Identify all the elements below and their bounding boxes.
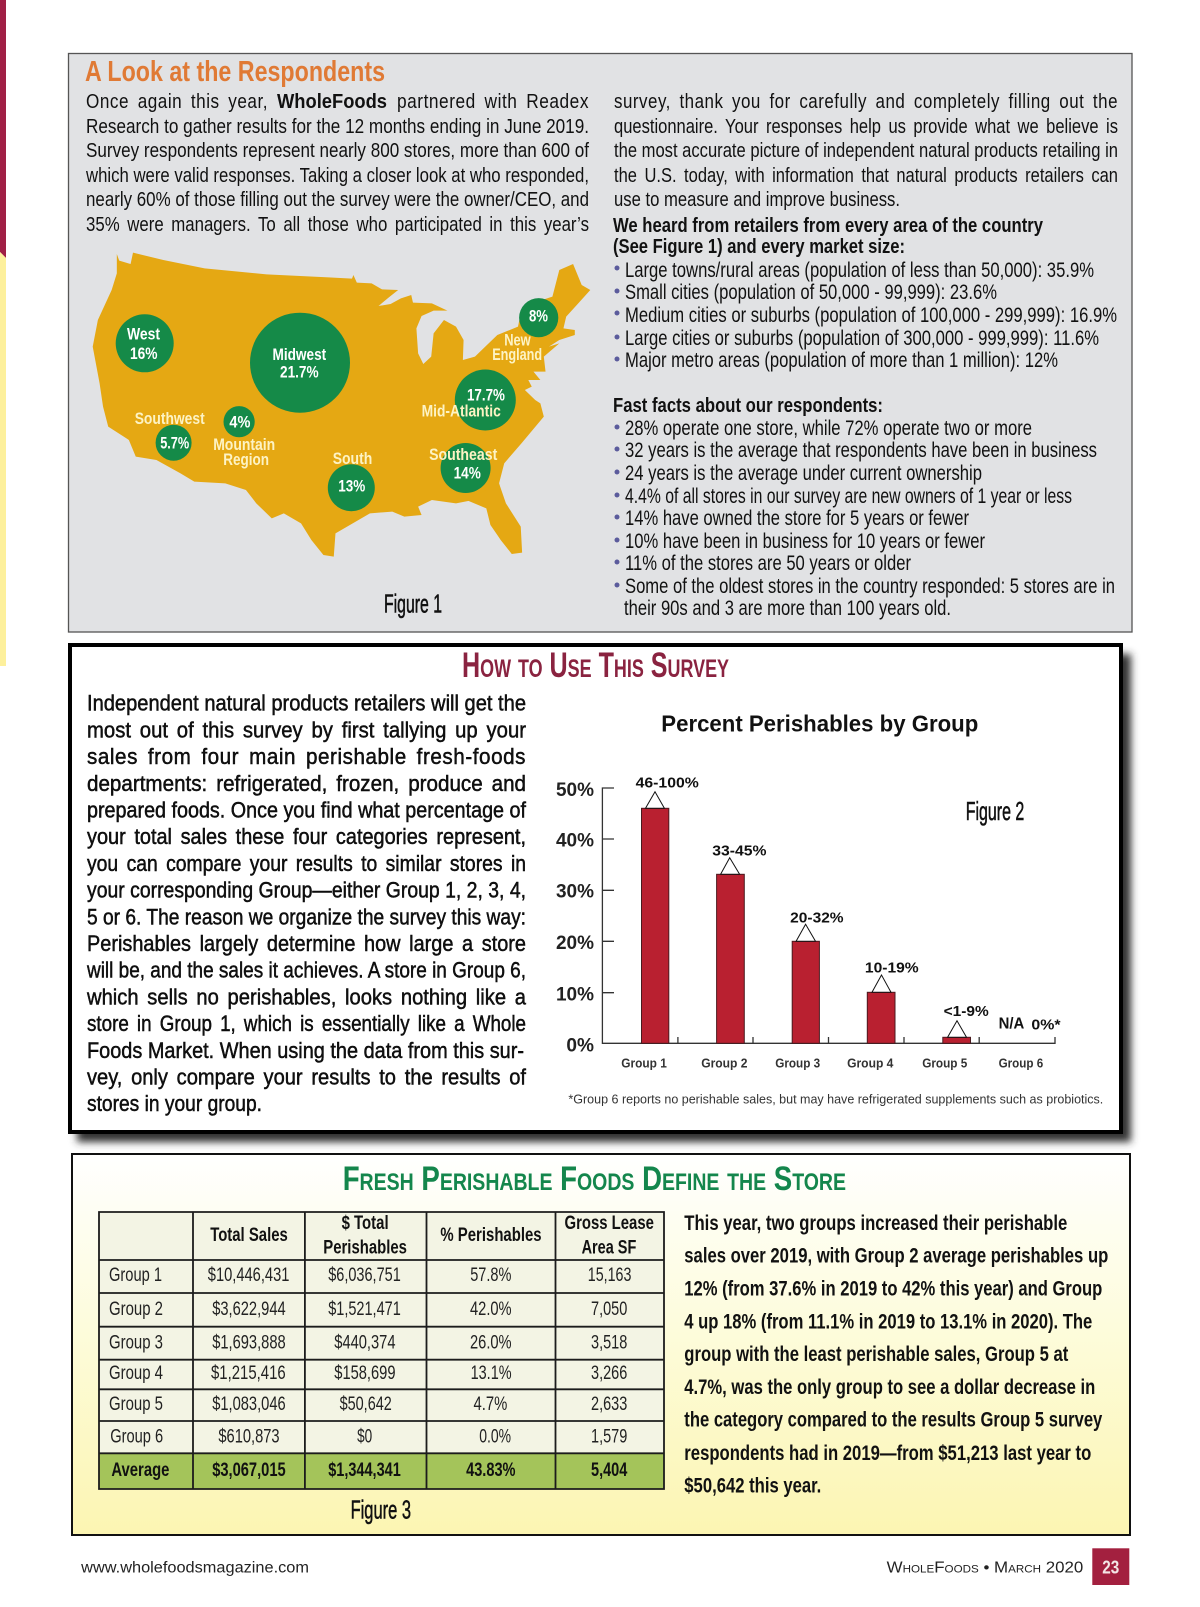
text block: intro left column: partnered with Readex	[397, 91, 589, 113]
text block: how to use: which sells no perishables, looks nothing like a	[86, 984, 526, 1009]
footer url: www.wholefoodsmagazine.com	[80, 1559, 309, 1576]
row: average: $3,067,015	[212, 1459, 286, 1481]
value labels: N/A	[999, 1015, 1024, 1032]
row: group 5: Group 5	[109, 1393, 163, 1415]
text block: how to use: departments: refrigerated, frozen, produce and	[87, 771, 526, 796]
heading: fresh perishable foods: Fresh Perishable Foods Define the Store	[343, 1160, 846, 1198]
value labels: 20-32%	[790, 910, 844, 926]
text block: intro right column	[614, 91, 1118, 211]
region labels: Southeast	[429, 446, 498, 464]
row: group 1: Group 1	[109, 1264, 162, 1286]
region labels: South	[333, 450, 372, 468]
map: regional respondents	[93, 253, 590, 557]
region labels: Mountain	[213, 436, 275, 454]
group labels: Group 5	[922, 1055, 967, 1070]
row: group 3: 26.0%	[470, 1331, 512, 1353]
text block: market size list: (See Figure 1) and every market size:	[613, 235, 905, 258]
row: group 4: 13.1%	[471, 1362, 512, 1384]
text block: how to use: your corresponding Group—either Group 1, 2, 3, 4,	[87, 878, 526, 903]
region bubbles	[116, 298, 558, 511]
text block: perishables commentary: respondents had in 2019—from $51,213 last year to	[684, 1442, 1091, 1465]
group labels: Group 4	[847, 1055, 894, 1070]
row: group 4: $158,699	[334, 1362, 396, 1384]
row: group 1	[109, 1264, 631, 1286]
text block: how to use: Independent natural products retailers will get the	[87, 691, 526, 716]
row: group 5: $50,642	[340, 1393, 392, 1415]
row: group 6: $610,873	[218, 1425, 280, 1447]
text block: intro left column: Survey respondents represent nearly 800 stores, more than 600 of	[86, 140, 589, 162]
row: group 3: $1,693,888	[212, 1331, 286, 1353]
text block: intro right column: survey, thank you for carefully and completely filling out the	[614, 91, 1118, 113]
panel: fresh perishable foods define the store	[72, 1154, 1130, 1535]
row: group 3: $440,374	[334, 1331, 396, 1353]
chart footnote: *Group 6 reports no perishable sales, but may have refrigerated supplements such as probiotics.	[568, 1092, 1103, 1106]
text block: fast facts list	[613, 394, 1115, 620]
text block: intro left column: Research to gather results for the 12 months ending in June 2019.	[86, 116, 589, 138]
map shape: united states	[93, 253, 590, 557]
region labels: 21.7%	[280, 363, 319, 381]
text block: perishables commentary: 4.7%, was the only group to see a dollar decrease in	[684, 1376, 1095, 1399]
region labels: 13%	[338, 478, 365, 496]
region labels: Region	[223, 451, 269, 469]
value labels	[636, 775, 1061, 1033]
text block: intro right column: use to measure and improve business.	[614, 189, 900, 211]
row: group 3: Group 3	[109, 1331, 163, 1353]
value labels: 46-100%	[636, 775, 699, 791]
text block: fast facts list: 28% operate one store, while 72% operate two or more	[625, 417, 1032, 440]
region labels: 8%	[529, 308, 548, 326]
row: average: $1,344,341	[328, 1459, 401, 1481]
table header: % Perishables	[440, 1224, 542, 1246]
table header: $ Total	[342, 1212, 389, 1234]
caption: figure 3: Figure 3	[351, 1494, 411, 1524]
region labels: Southwest	[135, 410, 205, 428]
row: average: 5,404	[591, 1459, 627, 1481]
page number: 23	[1102, 1557, 1119, 1577]
region labels: 4%	[229, 413, 251, 431]
y axis labels: 30%	[556, 882, 594, 903]
bars	[642, 808, 970, 1043]
group labels: Group 2	[701, 1055, 748, 1070]
text block: market size list: Large towns/rural areas (population of less than 50,000): 35.9%	[625, 259, 1094, 282]
text block: how to use: stores in your group.	[87, 1091, 262, 1116]
text block: intro left column: 35% were managers. To all those who participated in this year’s	[86, 214, 589, 236]
text block: fast facts list: 10% have been in business for 10 years or fewer	[625, 530, 985, 553]
group labels: Group 1	[621, 1055, 667, 1070]
row: group 1: $10,446,431	[208, 1264, 289, 1286]
row: group 4: 3,266	[591, 1362, 627, 1384]
text block: how to use: your total sales these four categories represent,	[87, 824, 526, 849]
panel shadow	[77, 654, 1131, 1142]
row: average: 43.83%	[466, 1459, 516, 1481]
text block: how to use: you can compare your results to similar stores in	[87, 851, 526, 876]
value labels: 10-19%	[865, 960, 919, 976]
row: group 2: 42.0%	[470, 1298, 512, 1320]
row: group 5: 4.7%	[474, 1393, 507, 1415]
chart title: Percent Perishables by Group	[661, 711, 978, 737]
row: group 2: 7,050	[591, 1298, 627, 1320]
region labels: New	[504, 331, 531, 349]
table header: Area SF	[582, 1236, 636, 1258]
row: group 6: 0.0%	[479, 1425, 511, 1447]
text block: perishables commentary: the category compared to the results Group 5 survey	[684, 1409, 1103, 1432]
row: group 5	[109, 1393, 627, 1415]
row: group 4	[109, 1362, 627, 1384]
row: group 6: 1,579	[591, 1425, 627, 1447]
text block: how to use: will be, and the sales it achieves. A store in Group 6,	[86, 958, 526, 983]
y axis labels	[556, 780, 594, 1057]
text block: perishables commentary: $50,642 this year.	[684, 1475, 821, 1498]
left page edge stripes	[0, 0, 6, 666]
text block: how to use: store in Group 1, which is essentially like a Whole	[87, 1011, 526, 1036]
row: group 5: 2,633	[591, 1393, 627, 1415]
row: group 2: $1,521,471	[328, 1298, 401, 1320]
region labels: 16%	[130, 345, 158, 363]
panel: how to use this survey	[70, 645, 1121, 1132]
text block: fast facts list: Fast facts about our respondents:	[613, 394, 883, 417]
y axis labels: 10%	[556, 985, 594, 1006]
text block: how to use: most out of this survey by first tallying up your	[87, 717, 526, 742]
footer issue: WholeFoods • March 2020	[887, 1560, 1083, 1577]
text block: intro left column: nearly 60% of those filling out the survey were the owner/CEO, and	[86, 189, 589, 211]
text block: how to use: Foods Market. When using the data from this sur-	[87, 1038, 524, 1063]
text block: how to use: prepared foods. Once you find what percentage of	[87, 798, 527, 822]
axes	[602, 788, 1055, 1043]
value labels: 0%*	[1031, 1017, 1061, 1033]
table header: Perishables	[323, 1236, 407, 1258]
value labels: 33-45%	[712, 843, 767, 859]
y axis labels: 0%	[566, 1036, 594, 1057]
text block: intro left column	[85, 91, 589, 236]
table: figure 3	[99, 1212, 664, 1489]
heading: a look at the respondents: A Look at the Respondents	[85, 56, 385, 88]
region labels: 5.7%	[160, 434, 189, 452]
region labels: 14%	[454, 464, 481, 482]
group labels: Group 3	[775, 1055, 820, 1070]
table header: Total Sales	[210, 1224, 288, 1246]
region labels	[127, 308, 548, 496]
group labels	[621, 1055, 1043, 1070]
row: group 2	[109, 1298, 627, 1320]
row: group 5: $1,083,046	[212, 1393, 286, 1415]
page number	[1092, 1548, 1129, 1585]
caption: figure 1: Figure 1	[384, 589, 442, 619]
text block: fast facts list: 11% of the stores are 50 years or older	[625, 552, 911, 575]
region labels: 17.7%	[467, 387, 505, 405]
row: group 2: Group 2	[109, 1298, 163, 1320]
heading: how to use this survey: How to Use This Survey	[462, 646, 729, 685]
text block: how to use: vey, only compare your results to the results of	[87, 1064, 527, 1090]
region labels: Mid-Atlantic	[422, 403, 501, 421]
text block: market size list: We heard from retailers from every area of the country	[613, 214, 1043, 237]
text block: intro left column: Once again this year,	[86, 91, 268, 113]
text block: perishables commentary	[684, 1212, 1108, 1498]
value labels: <1-9%	[944, 1004, 989, 1020]
text block: how to use: sales from four main perishable fresh-foods	[87, 744, 526, 769]
row: average: Average	[111, 1459, 170, 1481]
caption: figure 2: Figure 2	[966, 796, 1024, 826]
text block: market size list: Major metro areas (population of more than 1 million): 12%	[625, 349, 1058, 372]
row: group 4: Group 4	[109, 1362, 163, 1384]
value markers	[646, 792, 966, 1037]
row: group 1: 57.8%	[470, 1264, 511, 1286]
table header: Gross Lease	[564, 1212, 654, 1234]
row: group 6: Group 6	[110, 1425, 163, 1447]
text block: market size list: Small cities (population of 50,000 - 99,999): 23.6%	[625, 281, 997, 304]
region labels: England	[492, 346, 542, 364]
y axis labels: 20%	[556, 933, 594, 954]
y axis labels: 50%	[556, 780, 594, 801]
region labels: Midwest	[272, 346, 327, 364]
text block: perishables commentary: group with the least perishable sales, Group 5 at	[684, 1343, 1068, 1366]
text block: how to use: 5 or 6. The reason we organize the survey this way:	[87, 904, 526, 929]
text block: perishables commentary: This year, two groups increased their perishable	[684, 1212, 1067, 1235]
chart: percent perishables by group	[556, 711, 1103, 1106]
row: group 1: $6,036,751	[328, 1264, 401, 1286]
row: group 3	[109, 1331, 627, 1353]
table header	[210, 1212, 654, 1258]
region labels: West	[127, 325, 160, 343]
text block: intro left column: which were valid responses. Taking a closer look at who responded,	[85, 165, 589, 187]
panel: a look at the respondents	[68, 54, 1132, 632]
row: group 4: $1,215,416	[211, 1362, 286, 1384]
text block: fast facts list: 24 years is the average under current ownership	[625, 462, 982, 485]
row: average	[111, 1459, 627, 1481]
text block: perishables commentary: 4 up 18% (from 11.1% in 2019 to 13.1% in 2020). The	[684, 1310, 1092, 1333]
footer	[80, 1548, 1129, 1585]
text block: fast facts list: 14% have owned the store for 5 years or fewer	[625, 507, 969, 530]
group labels: Group 6	[999, 1055, 1043, 1070]
text block: intro left column: WholeFoods	[277, 91, 387, 113]
text block: market size list	[613, 214, 1117, 372]
text block: fast facts list: their 90s and 3 are more than 100 years old.	[624, 597, 951, 620]
y axis labels: 40%	[556, 831, 594, 852]
row: group 6: $0	[357, 1425, 372, 1447]
row: group 1: 15,163	[588, 1264, 631, 1286]
row: group 3: 3,518	[591, 1331, 627, 1353]
row: group 2: $3,622,944	[212, 1298, 286, 1320]
text block: perishables commentary: 12% (from 37.6% in 2019 to 42% this year) and Group	[684, 1278, 1102, 1301]
text block: how to use: Perishables largely determine how large a store	[87, 931, 526, 956]
text block: how to use	[86, 691, 527, 1116]
row: group 6	[110, 1425, 627, 1447]
